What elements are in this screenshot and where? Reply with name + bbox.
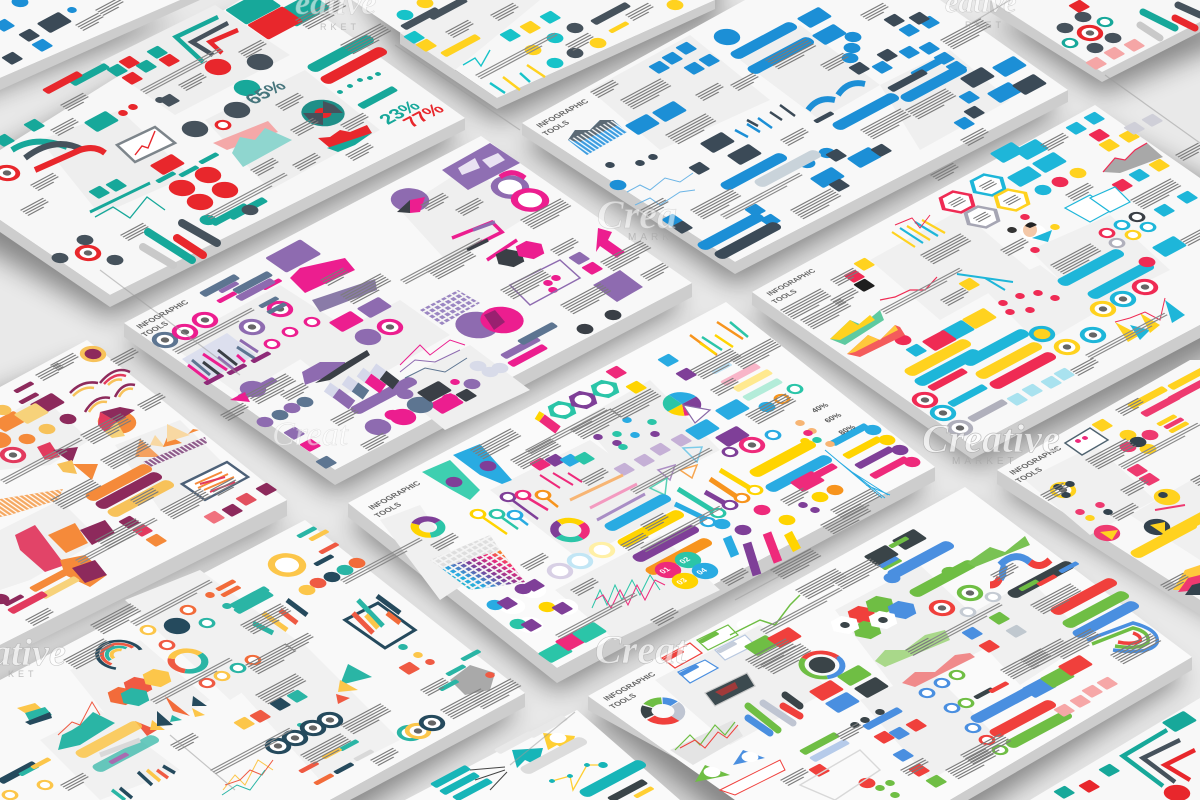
watermark: Creative Market top bbox=[295, 0, 376, 32]
panel: pink and yellow sheet, right edge bbox=[997, 360, 1200, 600]
outline icons bbox=[1006, 367, 1075, 406]
bottom tags bbox=[577, 759, 655, 800]
map bbox=[438, 649, 497, 695]
bubbles bbox=[483, 578, 584, 636]
outlined chains bbox=[570, 475, 645, 520]
table bbox=[1005, 560, 1080, 599]
people and bars bbox=[203, 579, 274, 614]
blocks bbox=[730, 595, 802, 656]
arrows bbox=[675, 470, 753, 520]
chart: lines bbox=[222, 760, 273, 795]
panel: multicolour sheet, centre bbox=[348, 302, 935, 668]
stick lines bbox=[490, 65, 545, 93]
purple elements bbox=[218, 239, 643, 440]
teal blocks bbox=[430, 765, 493, 800]
panel: blue sheet corner, top left bbox=[0, 0, 180, 78]
chart: wave area bbox=[670, 720, 743, 765]
wires bbox=[470, 767, 507, 790]
watermark: Creative Market lower centre: Creat bbox=[595, 627, 688, 672]
panel: green, red and blue sheet, lower right bbox=[588, 487, 1192, 800]
chart: blue histogram bbox=[568, 120, 627, 155]
concentric arc donut bbox=[88, 635, 152, 675]
rocket bbox=[230, 377, 278, 402]
text blocks bbox=[75, 0, 126, 31]
s-shapes bbox=[863, 529, 927, 570]
cyan puzzle bbox=[684, 399, 779, 440]
person circle bbox=[1005, 213, 1062, 254]
text blocks bbox=[60, 538, 524, 791]
watermark: Creative Market top right and mid left: Creat bbox=[272, 416, 350, 453]
text blocks bbox=[1040, 398, 1200, 591]
chart: arc bbox=[1087, 623, 1157, 651]
percentage rings bbox=[541, 539, 621, 582]
map bbox=[442, 143, 520, 190]
panel: blue sheet, top centre right bbox=[522, 0, 1068, 262]
triangle outline bbox=[683, 405, 710, 423]
triangles bbox=[650, 447, 702, 495]
s-curve bbox=[990, 557, 1050, 585]
lower tags bbox=[0, 523, 167, 614]
teal line chart bbox=[463, 50, 490, 66]
bent arrows bbox=[1123, 730, 1195, 786]
panel: yellow and teal sheet, top centre bbox=[352, 0, 715, 98]
map pins bbox=[295, 556, 369, 597]
houses bbox=[862, 707, 927, 744]
bar frame bbox=[345, 596, 415, 648]
numbered blobs: 02 bbox=[677, 556, 693, 565]
3d boxes bbox=[15, 520, 115, 587]
gears bbox=[923, 582, 1005, 619]
text blocks bbox=[20, 0, 394, 241]
tags bbox=[1127, 367, 1200, 433]
text: 23 percent and 77 percent: 23% bbox=[375, 98, 426, 128]
left blocks bbox=[799, 708, 887, 777]
panel: yellow, red and cyan sheet, right bbox=[752, 105, 1200, 446]
dot rows bbox=[793, 419, 837, 448]
yellow bands bbox=[1128, 501, 1200, 559]
tiny icons bbox=[396, 643, 437, 675]
hexagons bbox=[825, 593, 922, 642]
title: INFOGRAPHIC bbox=[764, 267, 818, 297]
venn overlap bbox=[471, 301, 533, 339]
chart: yellow and cyan bars bbox=[892, 215, 945, 247]
cones bbox=[336, 664, 372, 704]
donuts bbox=[1088, 516, 1176, 544]
grey elements bbox=[941, 113, 1163, 439]
flower bbox=[1116, 428, 1162, 456]
top connected tags bbox=[260, 526, 340, 582]
number tags bbox=[892, 748, 947, 788]
panel: teal and red sheet, top right bbox=[990, 0, 1200, 72]
donut bbox=[409, 516, 447, 538]
chart: line with dots bbox=[880, 277, 937, 300]
bottom tiles bbox=[537, 622, 607, 663]
chain rings bbox=[483, 170, 557, 217]
ribbons bbox=[529, 451, 595, 488]
sticks bbox=[1140, 5, 1200, 38]
numbered blobs: 04 bbox=[694, 567, 710, 576]
bars bbox=[112, 766, 175, 800]
numbered blobs bbox=[649, 549, 724, 592]
pills bbox=[961, 685, 1075, 757]
watermark: Creative Market top right and mid left: RKET bbox=[965, 20, 1005, 30]
rings with persons bbox=[718, 382, 807, 459]
icons bbox=[1053, 676, 1118, 717]
maroon tiles bbox=[3, 381, 277, 606]
triangle chart bbox=[135, 424, 207, 468]
teal and red tiles bbox=[1053, 711, 1197, 800]
rings row bbox=[146, 309, 224, 351]
numbered blobs: 01 bbox=[657, 566, 673, 575]
light tiles bbox=[466, 359, 512, 379]
clock bbox=[1044, 479, 1082, 501]
chart: donut bbox=[292, 94, 354, 132]
purple puzzle bbox=[714, 426, 750, 447]
small pins bbox=[1073, 501, 1115, 522]
title: TOOLS bbox=[1013, 466, 1045, 484]
chart: pink and teal waves bbox=[592, 575, 665, 608]
scale bbox=[957, 274, 1013, 290]
colour tiles bbox=[808, 665, 889, 713]
chart: area wave bbox=[302, 279, 377, 385]
pie bbox=[383, 183, 437, 217]
arrow tags bbox=[298, 739, 375, 785]
dark icons bbox=[416, 308, 625, 402]
charts: green and red histograms bbox=[875, 630, 975, 687]
flags bbox=[512, 731, 575, 768]
text blocks bbox=[745, 558, 1164, 786]
arrow bars bbox=[253, 600, 307, 633]
dark ribbon bbox=[853, 278, 875, 292]
pink and orange tiles bbox=[0, 403, 257, 524]
monitor bbox=[182, 462, 248, 500]
grid squares bbox=[420, 290, 480, 325]
diamond process bbox=[37, 442, 98, 480]
dark elements bbox=[603, 11, 1047, 260]
teal elements bbox=[0, 0, 398, 227]
panel: orange and teal sheet, lower left bbox=[0, 520, 525, 800]
text blocks bbox=[0, 348, 241, 626]
yellow tiles and rings bbox=[413, 0, 687, 57]
donut bbox=[164, 646, 212, 676]
dark icons bbox=[1, 12, 72, 65]
pointer tiles bbox=[1021, 655, 1093, 698]
pie bbox=[90, 405, 144, 439]
pencil bbox=[537, 415, 558, 430]
bottom rings bbox=[391, 712, 451, 744]
watermark: Creative Market top right and mid left bbox=[272, 0, 1017, 453]
colour tags with connector lines bbox=[825, 423, 924, 498]
title: TOOLS bbox=[372, 501, 404, 519]
rings bbox=[1048, 324, 1112, 358]
text blocks bbox=[172, 193, 671, 451]
chart: teal mountain bbox=[58, 702, 115, 750]
speech outlines bbox=[1065, 187, 1130, 222]
timeline bbox=[0, 757, 57, 800]
red elements bbox=[0, 6, 390, 264]
text: percentages: 80% bbox=[836, 423, 858, 436]
red label bbox=[1068, 0, 1090, 13]
title: TOOLS bbox=[139, 320, 171, 338]
pins bbox=[695, 750, 785, 795]
watermark: Creative Market centre right: MARKET bbox=[952, 456, 1018, 467]
red speech bbox=[789, 471, 847, 514]
chart: hatched area bbox=[1103, 143, 1163, 173]
network rings bbox=[1053, 10, 1125, 55]
outline red frames bbox=[800, 750, 880, 800]
monitor map bbox=[705, 673, 755, 706]
shield bbox=[1023, 323, 1061, 345]
frame with rising line bbox=[117, 127, 175, 162]
arrows bbox=[83, 463, 177, 518]
hexagons bbox=[931, 169, 1038, 233]
panel: teal and red sheet corner, bottom right bbox=[1030, 698, 1200, 800]
ring icons bbox=[915, 668, 1010, 715]
text: 23 percent and 77 percent: 77% bbox=[399, 101, 450, 131]
line chart bbox=[548, 761, 610, 790]
green area bbox=[967, 536, 1030, 567]
dark elements bbox=[48, 51, 279, 267]
striped bars bbox=[0, 489, 63, 517]
teal arcs and bars bbox=[12, 142, 217, 265]
blue elements bbox=[606, 7, 1027, 251]
dotted capsules bbox=[494, 715, 590, 775]
title: INFOGRAPHIC bbox=[1007, 445, 1064, 476]
outlined tags bbox=[662, 625, 755, 683]
panel: pink and purple sheet, centre bbox=[124, 136, 692, 470]
rainbow arcs bbox=[70, 370, 135, 412]
chart: layered area bbox=[1173, 565, 1200, 595]
plane icons bbox=[710, 503, 799, 537]
progress rings bbox=[195, 653, 265, 690]
rings bbox=[136, 603, 219, 652]
chart: colour bars bbox=[690, 322, 748, 355]
chart: layered area bbox=[830, 310, 905, 357]
header bars bbox=[880, 540, 979, 598]
triangle chart bbox=[135, 696, 207, 736]
watermark: Creative Market top: RKET bbox=[320, 22, 360, 32]
red outline icons bbox=[1085, 38, 1145, 70]
watermark: Creative Market upper centre: MARK bbox=[628, 232, 673, 243]
chart: area charts bbox=[95, 121, 372, 218]
stars bbox=[855, 776, 902, 799]
chart: wheel bbox=[668, 396, 696, 412]
chain arrows bbox=[452, 222, 517, 260]
yellow elements bbox=[853, 129, 1170, 380]
globe bbox=[1148, 486, 1186, 510]
rainbow pills bbox=[602, 493, 715, 576]
chart: dot matrix bbox=[430, 535, 525, 590]
title: TOOLS bbox=[540, 119, 572, 137]
grey card bbox=[752, 149, 824, 188]
pin heads bbox=[466, 488, 555, 522]
ribbons bbox=[1048, 577, 1142, 639]
text blocks bbox=[430, 338, 884, 639]
panel: teal and yellow sheet, bottom centre bbox=[405, 710, 680, 800]
text: percentages: 60% bbox=[822, 411, 844, 424]
text: percentages: 40% bbox=[809, 401, 831, 414]
donuts bbox=[548, 516, 592, 544]
stopwatches bbox=[259, 709, 349, 757]
target circle bbox=[74, 343, 112, 365]
chart: grouped bars bbox=[182, 333, 272, 385]
title: INFOGRAPHIC bbox=[366, 480, 423, 511]
chart: multi line bbox=[400, 340, 467, 378]
red elements bbox=[843, 128, 1164, 411]
title: INFOGRAPHIC bbox=[601, 671, 658, 702]
watermark: Creative Market upper centre: Crea bbox=[597, 192, 677, 237]
title: TOOLS bbox=[607, 692, 639, 710]
arrow rings bbox=[696, 483, 767, 529]
pyramid bbox=[17, 703, 52, 725]
triangles chart bbox=[1115, 298, 1185, 342]
person ring bbox=[793, 647, 851, 683]
pink squares bbox=[1126, 463, 1160, 486]
text blocks bbox=[445, 3, 656, 79]
text blocks bbox=[780, 133, 1200, 376]
icon: bent arrows bbox=[176, 17, 238, 62]
dark progress bars bbox=[400, 0, 631, 60]
pastel pills bbox=[711, 362, 783, 401]
chart: column bars bbox=[327, 368, 396, 405]
slate elements bbox=[199, 271, 558, 469]
donut bbox=[639, 696, 687, 726]
cyan elements bbox=[905, 111, 1198, 424]
big tiles bbox=[422, 444, 512, 500]
tiles bbox=[233, 689, 308, 730]
people rows bbox=[73, 720, 162, 773]
pink elements bbox=[216, 258, 563, 452]
text: percentages bbox=[809, 401, 858, 436]
cart outline bbox=[510, 260, 580, 305]
monitor and tablet bbox=[1065, 418, 1113, 455]
chart: light line graph bbox=[627, 173, 695, 205]
numbered labels bbox=[605, 353, 697, 394]
title: INFOGRAPHIC bbox=[534, 98, 591, 129]
title: TOOLS bbox=[769, 288, 799, 305]
hex chain bbox=[542, 377, 625, 422]
arcs bbox=[735, 83, 865, 137]
numbered blobs: 03 bbox=[674, 577, 690, 586]
icons row bbox=[613, 433, 692, 476]
tag chevrons bbox=[663, 631, 738, 676]
pin sticks bbox=[478, 495, 558, 534]
tiny tabs bbox=[591, 416, 662, 451]
text: 65 percent: 65% bbox=[241, 78, 292, 108]
panel: teal and red sheet, top left bbox=[0, 0, 465, 295]
watermark: Creative Market lower left: KET bbox=[8, 669, 38, 679]
text blocks bbox=[590, 3, 994, 219]
stripe ribbons bbox=[727, 533, 797, 575]
hexes bbox=[490, 238, 550, 270]
panel: maroon and orange sheet, left bbox=[0, 340, 287, 645]
title: INFOGRAPHIC bbox=[134, 299, 191, 330]
folders bbox=[961, 611, 1027, 653]
big pills bbox=[747, 439, 838, 493]
3d bars bbox=[748, 695, 800, 733]
watermark: Creative Market centre right: Creative bbox=[922, 416, 1060, 461]
arrow up bbox=[568, 228, 625, 275]
text: 23 percent and 77 percent bbox=[375, 98, 450, 131]
blue icons bbox=[0, 0, 79, 52]
teal tiles and rings bbox=[393, 8, 567, 70]
hex chain bbox=[102, 666, 177, 709]
